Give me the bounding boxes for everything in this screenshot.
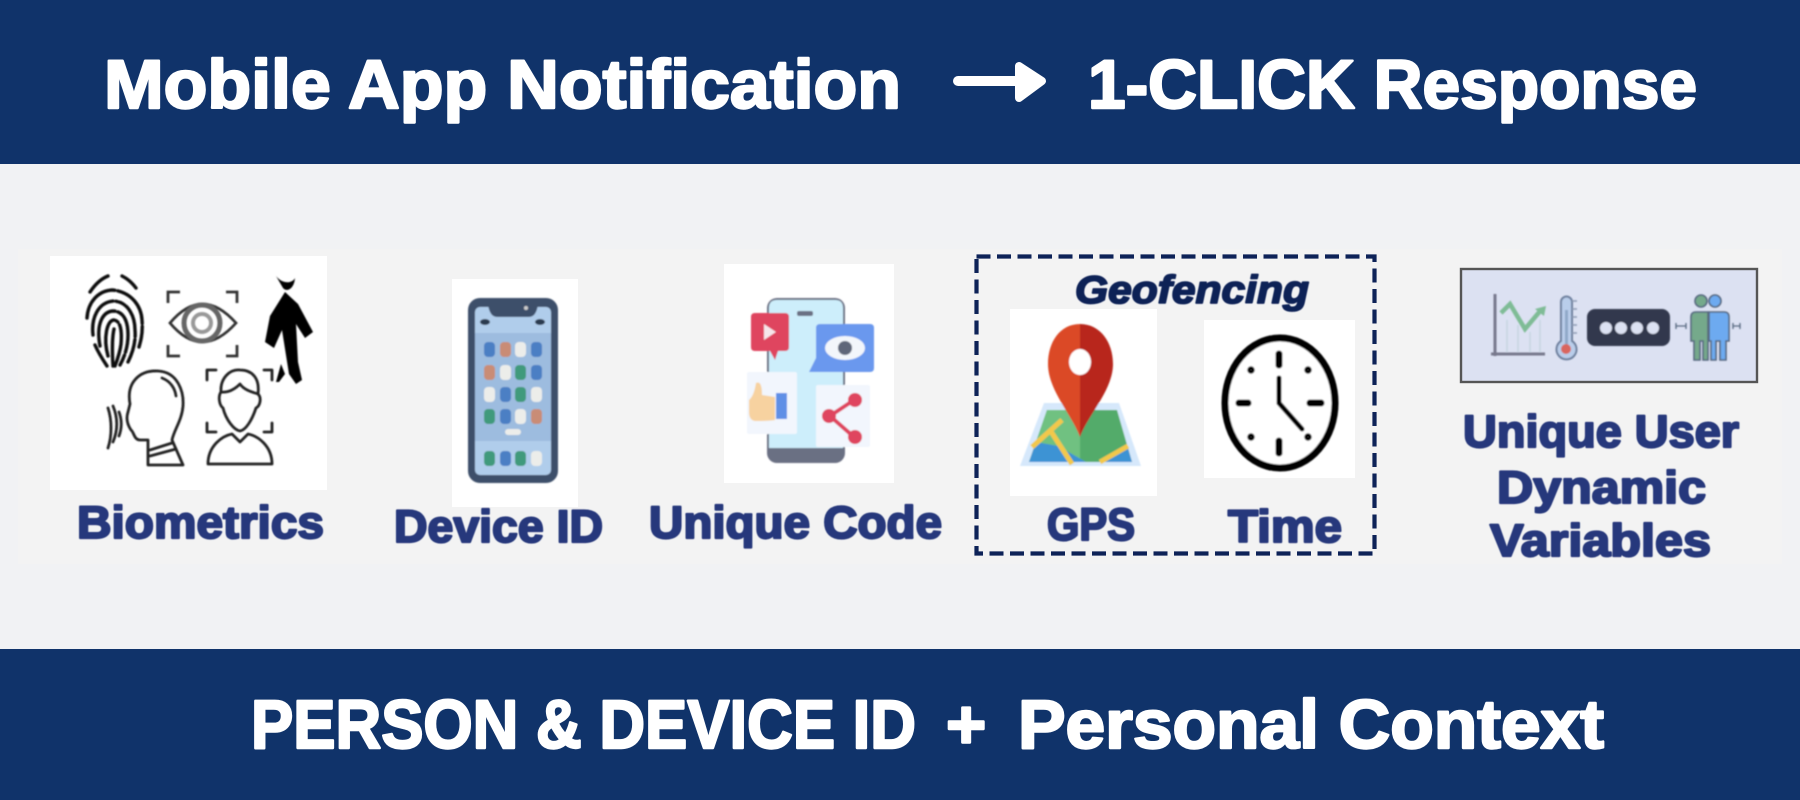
icon: fingerprint (87, 276, 142, 366)
icon: chart (1491, 294, 1546, 356)
sub-panel: time (1204, 320, 1355, 552)
icon: walking figure (265, 276, 313, 384)
label: gps: GPS (1047, 499, 1135, 550)
heading: one click response: 1-CLICK Response (1088, 46, 1697, 123)
icon: phone with social bubbles (747, 298, 874, 463)
icon: map pin (1020, 324, 1141, 466)
label: device id: Device ID (394, 501, 603, 552)
label: unique user dynamic variables: Dynamic (1497, 462, 1706, 513)
icon: thermometer (1556, 296, 1577, 359)
panel: geofencing (976, 256, 1374, 554)
panel: biometrics (50, 256, 327, 548)
icon: password field (1587, 309, 1670, 346)
panel: unique user dynamic variables (1461, 269, 1757, 566)
icon: voice profile (108, 371, 183, 465)
label: unique user dynamic variables: Unique User (1463, 406, 1739, 457)
label: unique user dynamic variables (1463, 406, 1739, 566)
heading: personal context: Personal Context (1018, 686, 1604, 763)
icon: clock (1225, 338, 1335, 468)
icon: variable set (1491, 294, 1740, 360)
dashed frame (976, 256, 1374, 554)
icon: two people (1676, 295, 1740, 360)
panel: unique code (649, 264, 942, 548)
label: biometrics: Biometrics (77, 497, 324, 548)
label: unique code: Unique Code (649, 497, 942, 548)
top banner (0, 0, 1800, 164)
icon: eye scan (168, 292, 237, 356)
arrow (958, 66, 1042, 98)
sub-panel: gps (1010, 309, 1157, 550)
heading: mobile app notification: Mobile App Notification (104, 46, 901, 123)
label: time: Time (1228, 501, 1342, 552)
heading: geofencing: Geofencing (1075, 269, 1309, 312)
icon: face scan (207, 370, 272, 464)
heading: person and device id: PERSON & DEVICE ID (251, 686, 916, 763)
panel: device id (394, 279, 603, 552)
label: unique user dynamic variables: Variables (1490, 515, 1711, 566)
bottom banner (0, 649, 1800, 800)
icon: smartphone (468, 298, 558, 483)
icon: biometrics set (87, 276, 313, 465)
heading: plus sign: + (946, 686, 986, 763)
